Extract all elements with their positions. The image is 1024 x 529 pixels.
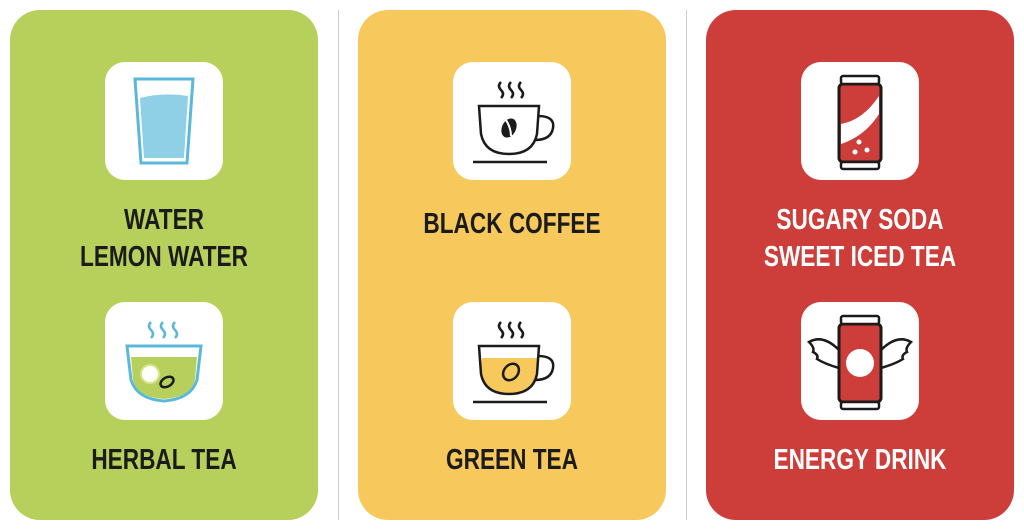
icon: black coffee cup: [453, 62, 571, 180]
label: black coffee: BLACK COFFEE: [423, 208, 601, 240]
label: herbal tea: HERBAL TEA: [91, 444, 237, 476]
icon: soda can: [801, 62, 919, 180]
icon: green tea cup: [453, 302, 571, 420]
label: sugary soda / sweet iced tea: [764, 204, 956, 273]
icon: energy drink with wings: [801, 302, 919, 420]
label: water / lemon water: [80, 204, 248, 273]
icon: water glass: [105, 62, 223, 180]
icon: herbal tea bowl: [105, 302, 223, 420]
label: sugary soda / sweet iced tea: SUGARY SODA: [776, 204, 944, 236]
label: green tea: GREEN TEA: [446, 444, 578, 476]
panel: red: [706, 10, 1014, 520]
label: energy drink: ENERGY DRINK: [773, 444, 947, 476]
label: sugary soda / sweet iced tea: SWEET ICED TEA: [764, 241, 956, 273]
label: water / lemon water: WATER: [124, 204, 204, 236]
panel: green: [10, 10, 318, 520]
panel: yellow: [358, 10, 666, 520]
label: water / lemon water: LEMON WATER: [80, 241, 248, 273]
